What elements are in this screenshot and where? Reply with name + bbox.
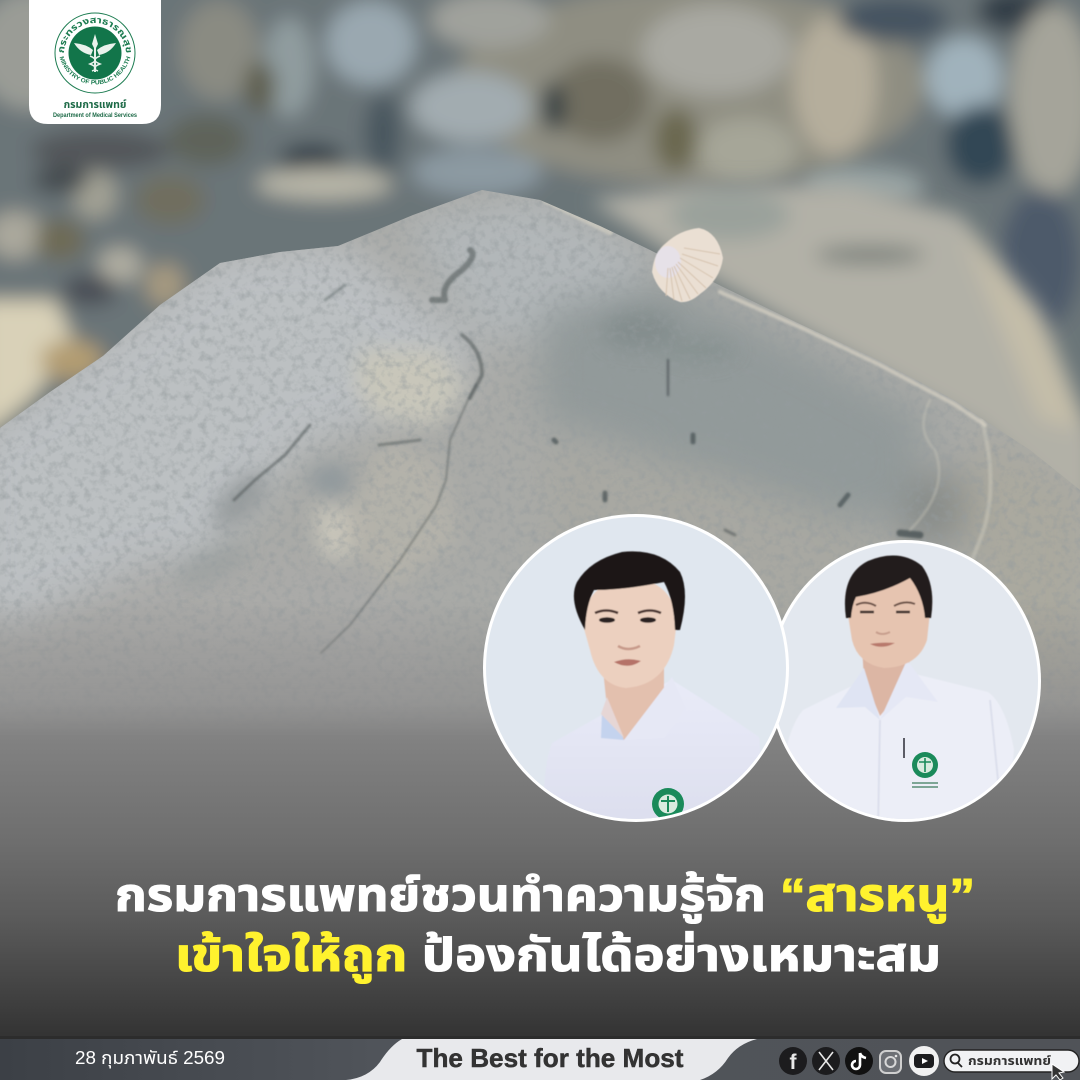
ministry seal: กระทรวงสาธารณสุข [59,18,131,53]
shirt [546,684,736,819]
caduceus [74,34,116,72]
shirt [788,676,1013,819]
slogan: The Best for the Most [416,1043,684,1073]
title: กรมการแพทย์ชวนทำความรู้จัก “สารหนู” [115,869,975,923]
search box: กรมการแพทย์ [968,1054,1051,1068]
neck [862,658,910,716]
shell [652,228,723,302]
logo card: Department of Medical Services [53,113,138,119]
face [583,578,677,688]
collar [624,688,664,739]
inner shirt [600,716,624,740]
neck [604,668,664,740]
hair [845,556,932,618]
main rock [0,190,1080,720]
icon: youtube [909,1046,939,1076]
icon: instagram [880,1051,901,1073]
icon: facebook [779,1047,807,1075]
facial features [595,610,661,613]
light ridges on rock [545,200,991,590]
background photo: blurred pebbles and rock [0,0,1080,729]
pocket and badge [903,738,905,758]
badge [652,788,684,820]
logo card [29,0,161,124]
rock grain [0,191,1080,644]
portrait: left doctor [480,510,800,830]
portrait: right doctor [776,540,1041,822]
icon: facebook: f [790,1051,798,1074]
collar [836,668,880,720]
face [848,572,930,668]
hair [574,551,685,630]
rock cracks [234,250,920,653]
icon: tiktok [845,1047,873,1075]
bottom dark gradient panel [0,600,1080,1040]
department name: กรมการแพทย์ [64,99,127,111]
search box [944,1050,1079,1080]
footer bar [0,1036,1080,1080]
title: เข้าใจให้ถูก ป้องกันได้อย่างเหมาะสม [175,929,941,983]
ministry seal: MINISTRY OF PUBLIC HEALTH [60,56,130,84]
facial features [856,602,915,606]
date: 28 กุมภาพันธ์ 2569 [75,1048,225,1069]
blurred pebbles [0,0,1080,440]
slogan ribbon [346,1039,757,1080]
background right rock [590,185,1080,530]
icon: X [812,1047,840,1075]
ministry seal [54,12,136,94]
title [115,869,975,983]
